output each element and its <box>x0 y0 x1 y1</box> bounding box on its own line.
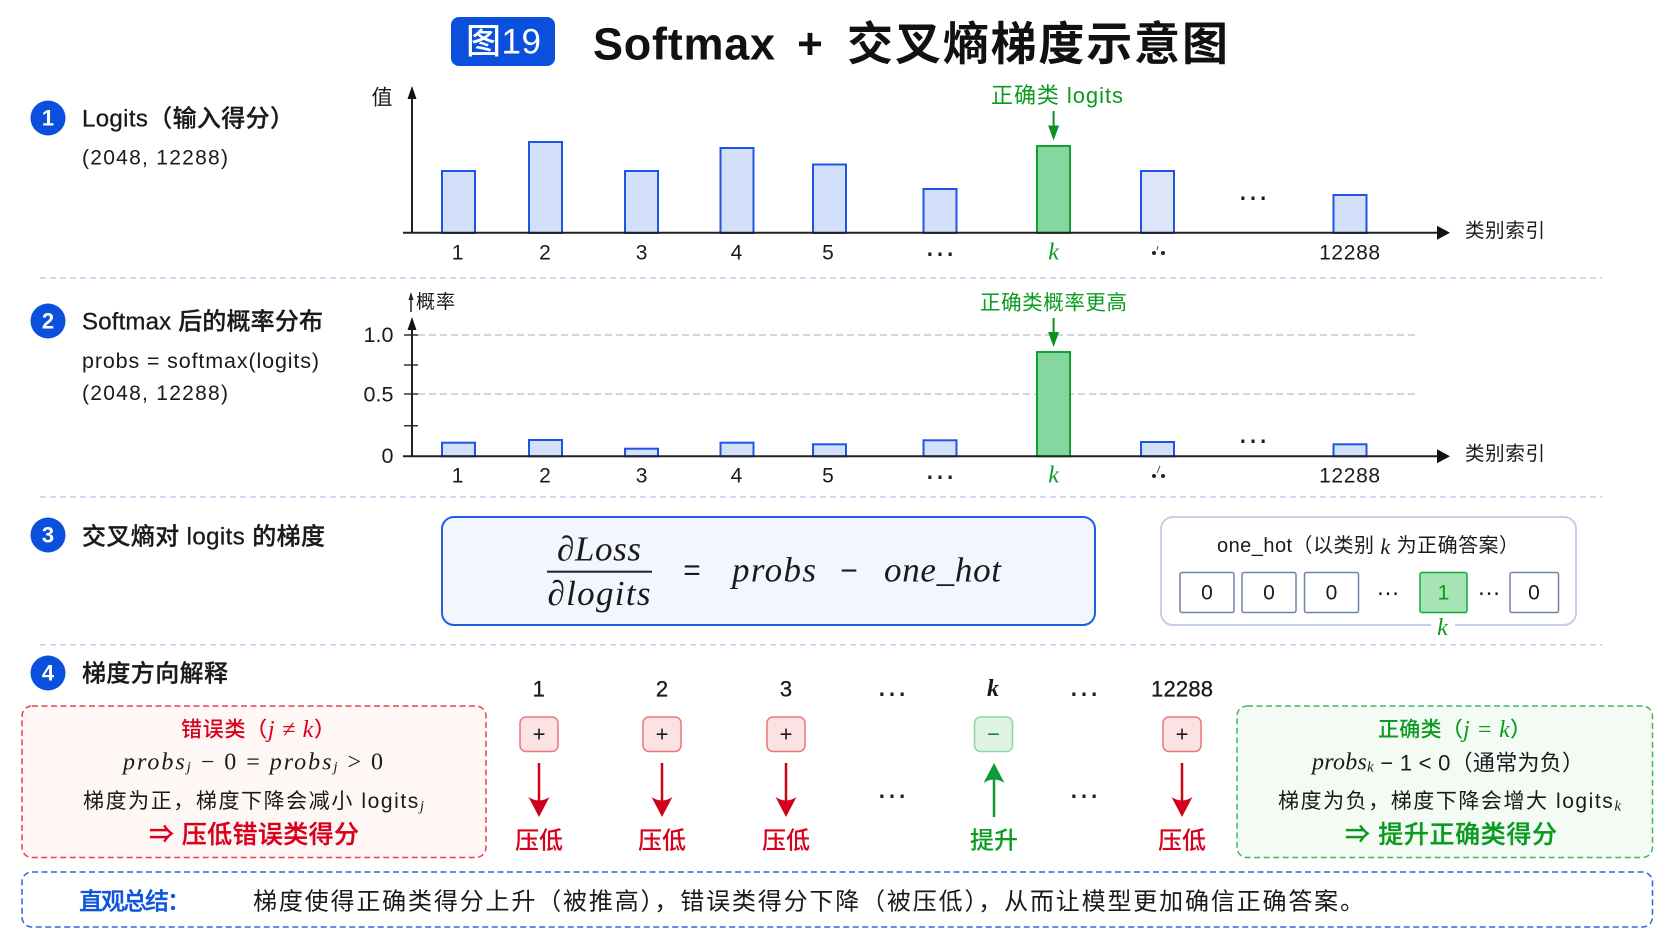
section 1 heading: Logits（输入得分） <box>82 106 294 132</box>
column 1: + <box>533 722 545 746</box>
correct class conclusion: ⇒ 提升正确类得分 <box>1345 821 1557 849</box>
x labels <box>452 171 1380 266</box>
column dots <box>876 769 1100 805</box>
x axis label: 类别索引 <box>1465 443 1545 465</box>
title <box>593 18 1228 70</box>
y ticks and values <box>364 323 418 468</box>
axes <box>403 317 1450 463</box>
correct class formula: k <box>1367 760 1374 776</box>
column 3: 压低 <box>762 828 810 854</box>
column 1: 压低 <box>515 828 563 854</box>
section 2 heading: probs = softmax(logits) <box>82 349 319 373</box>
summary box <box>22 872 1652 927</box>
cells <box>1180 572 1558 612</box>
column 12288: + <box>1176 722 1188 746</box>
column k: 提升 <box>970 828 1018 854</box>
correct class formula: − 1 < 0（通常为负） <box>1374 750 1584 775</box>
column 3: + <box>780 722 792 746</box>
wrong class formula: > 0 <box>340 750 383 776</box>
gridlines <box>418 335 1417 394</box>
wrong class explanation: j <box>418 798 424 814</box>
bars <box>442 142 1366 233</box>
column 2: 压低 <box>638 828 686 854</box>
x labels: … <box>1237 171 1269 207</box>
one_hot caption: one_hot（以类别 k 为正确答案） <box>1217 534 1519 558</box>
correct class explanation: k <box>1614 798 1621 814</box>
x labels: 1 <box>452 464 463 488</box>
x labels: 3 <box>636 464 647 488</box>
section 2 heading: Softmax 后的概率分布 <box>82 308 323 336</box>
fraction: ∂Loss <box>557 530 641 568</box>
panel: wrong class <box>22 706 486 858</box>
section 3 heading: 交叉熵对 logits 的梯度 <box>82 524 325 550</box>
callout: correct class higher probability: 正确类概率更高 <box>980 292 1127 314</box>
column 2 <box>638 717 686 854</box>
column headers: 1 <box>533 676 545 702</box>
x labels: 5 <box>822 464 834 488</box>
divider <box>40 644 1602 646</box>
callout: correct class logits: 正确类 logits <box>991 83 1123 108</box>
wrong class explanation: 梯度为正，梯度下降会减小 logits <box>83 790 418 813</box>
x labels: 2 <box>539 242 551 264</box>
x labels: 1 <box>452 242 463 264</box>
column 12288: 压低 <box>1158 828 1206 854</box>
title badge: 图19 <box>466 22 541 62</box>
cells: 0 <box>1201 582 1213 604</box>
section 3 heading: 3 <box>42 522 54 548</box>
equation right side: one_hot <box>884 550 1002 590</box>
section 4 heading: 4 <box>42 660 55 686</box>
y axis label: 值 <box>372 86 392 110</box>
x labels: k <box>1048 240 1059 266</box>
equation right side: probs <box>729 550 816 590</box>
title: + <box>797 20 823 68</box>
wrong class formula: j <box>185 760 191 776</box>
x labels: 2 <box>539 464 551 488</box>
equation right side: = <box>683 554 701 587</box>
panel: correct class <box>1237 706 1652 858</box>
column headers: 3 <box>780 676 792 702</box>
section 2 heading <box>30 304 323 405</box>
column headers: … <box>876 667 908 703</box>
cells: … <box>1376 574 1400 601</box>
section 2 heading: 2 <box>42 308 54 334</box>
x labels: … <box>924 227 956 263</box>
callout: correct class higher probability <box>980 292 1127 347</box>
column 3 <box>762 717 810 854</box>
section 3 heading <box>30 518 325 552</box>
bars <box>442 352 1366 456</box>
cells: … <box>1477 574 1501 601</box>
column dots: … <box>1068 769 1100 805</box>
column dots: … <box>876 769 908 805</box>
x labels: 4 <box>731 464 743 488</box>
column 1 <box>515 717 563 854</box>
column 12288 <box>1158 717 1206 854</box>
gradient direction columns <box>515 667 1213 854</box>
wrong class formula: probs <box>270 750 331 776</box>
column 2: + <box>656 722 668 746</box>
title: Softmax <box>593 18 775 70</box>
section 2 heading: (2048, 12288) <box>82 382 228 405</box>
column headers <box>533 667 1213 703</box>
axes <box>403 86 1450 240</box>
title: 交叉熵梯度示意图 <box>847 18 1228 70</box>
column headers: … <box>1068 667 1100 703</box>
k marker: k <box>1437 615 1448 641</box>
x labels: 12288 <box>1319 464 1380 488</box>
x labels: … <box>924 450 956 486</box>
column k: − <box>987 722 1000 746</box>
panel: one_hot <box>1161 517 1576 641</box>
cells: 0 <box>1326 582 1337 604</box>
cells: 0 <box>1263 582 1275 604</box>
x labels: 12288 <box>1319 242 1380 264</box>
wrong class heading: 错误类（j ≠ k） <box>181 717 335 743</box>
x labels: 5 <box>822 242 834 264</box>
divider <box>40 277 1602 279</box>
summary text: 梯度使得正确类得分上升（被推高），错误类得分下降（被压低），从而让模型更加确信正确答案。 <box>253 888 1364 916</box>
column headers: 2 <box>656 676 668 702</box>
section 1 heading: (2048, 12288) <box>82 146 228 170</box>
column k <box>970 717 1018 854</box>
callout: correct class logits <box>991 83 1123 140</box>
summary label: 直观总结： <box>79 888 191 916</box>
cells: 1 <box>1438 582 1449 604</box>
wrong class formula: probs <box>123 750 185 776</box>
column headers: 12288 <box>1151 676 1213 702</box>
title badge <box>451 17 555 66</box>
section 4 heading: 梯度方向解释 <box>82 660 228 688</box>
panel: gradient formula <box>442 517 1095 625</box>
y ticks and values: 0 <box>382 444 394 468</box>
x axis label: 类别索引 <box>1465 220 1545 242</box>
x labels: 4 <box>731 242 743 264</box>
equation right side: − <box>840 554 858 588</box>
x labels: … <box>1237 414 1269 450</box>
section 1 heading: 1 <box>42 106 54 130</box>
divider <box>40 496 1602 498</box>
fraction: ∂logits <box>548 574 650 613</box>
wrong class conclusion: ⇒ 压低错误类得分 <box>149 821 359 849</box>
x labels: 3 <box>636 242 647 264</box>
section 1 heading <box>30 100 294 170</box>
correct class formula: probs <box>1310 750 1367 776</box>
y axis label: 概率 <box>416 291 455 313</box>
fraction <box>547 530 652 613</box>
x labels <box>452 414 1380 488</box>
y ticks and values: 0.5 <box>364 382 394 406</box>
column headers: k <box>987 676 999 702</box>
wrong class formula: j <box>331 760 338 776</box>
correct class heading: 正确类（j = k） <box>1378 717 1531 743</box>
x labels: k <box>1048 462 1059 488</box>
cells: 0 <box>1528 582 1540 604</box>
k marker <box>1431 615 1455 641</box>
wrong class formula: − 0 = <box>193 750 268 776</box>
correct class explanation: 梯度为负，梯度下降会增大 logits <box>1278 790 1613 813</box>
section 4 heading <box>30 656 228 690</box>
chart: softmax probabilities <box>364 291 1545 488</box>
equation right side <box>683 550 1002 590</box>
chart: logits bars <box>372 83 1545 266</box>
y ticks and values: 1.0 <box>364 323 394 347</box>
